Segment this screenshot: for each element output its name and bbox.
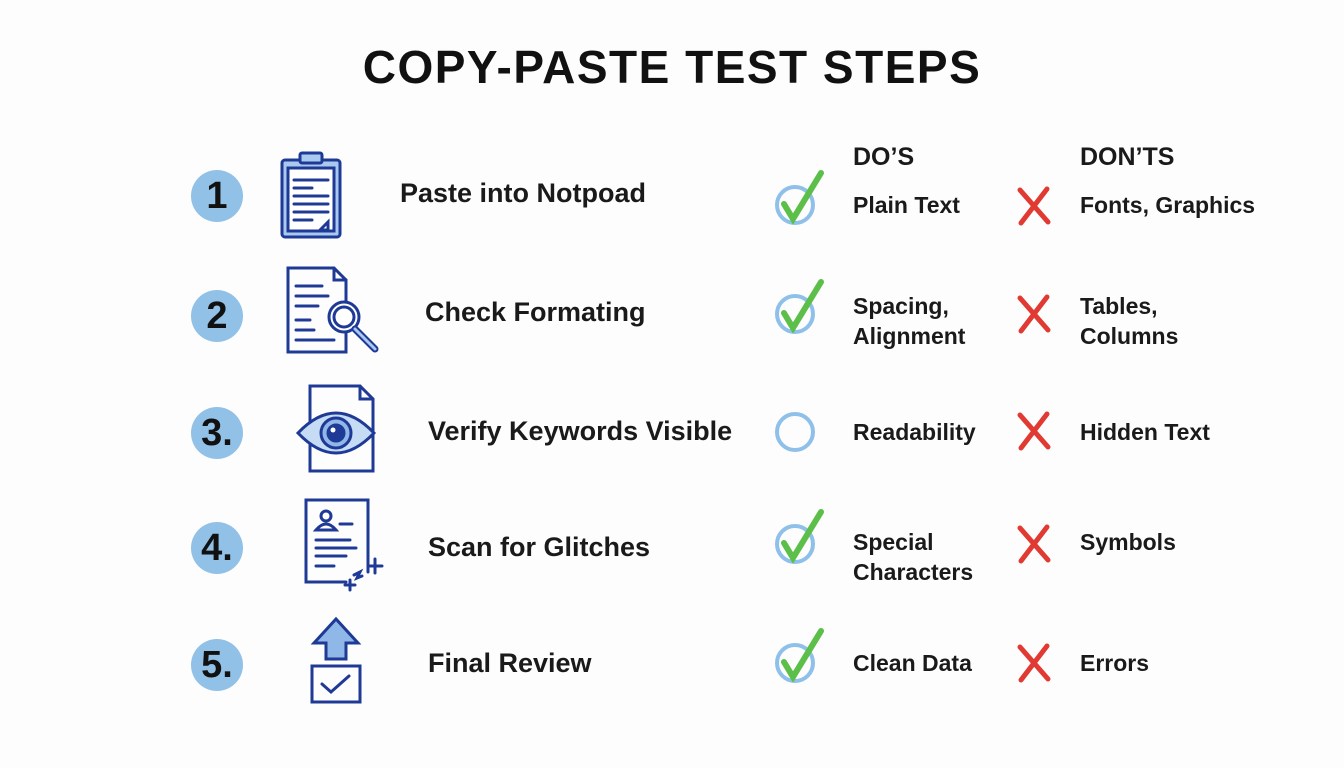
text: Characters [853,559,973,585]
number 4 [191,522,243,574]
text: Clean Data [853,650,972,676]
header: do's: DO’S [853,143,914,171]
x marks [1020,189,1048,680]
text: Errors [1080,650,1149,676]
text: Tables, [1080,293,1158,319]
icon: document with eye [298,386,374,471]
text: Verify Keywords Visible [428,416,732,446]
text: Columns [1080,323,1178,349]
text: Alignment [853,323,965,349]
number 3: 3. [201,412,233,454]
don't texts: Fonts, Graphics [1080,192,1255,218]
step texts: Paste into Notpoad [400,178,646,208]
number 2 [191,290,243,342]
do texts: Plain Text [853,192,960,218]
text: Check Formating [425,297,646,327]
check 4 [777,512,821,562]
number 5 [191,639,243,691]
text: Symbols [1080,529,1176,555]
number 5: 5. [201,644,233,686]
check 5 [777,631,821,681]
text: Readability [853,419,976,445]
check 1 [777,173,821,223]
text: Scan for Glitches [428,532,650,562]
text: Hidden Text [1080,419,1210,445]
icon: resume with glitch [306,500,382,590]
text: Final Review [428,648,592,678]
check 2 [777,282,821,332]
number 4: 4. [201,527,233,569]
number 2: 2 [206,295,228,337]
text: Spacing, [853,293,949,319]
icon: document with magnifier [288,268,375,352]
number 1 [191,170,243,222]
number 3 [191,407,243,459]
circle 3 [777,414,813,450]
icon: arrow and checkbox [312,619,360,702]
text: Special [853,529,934,555]
header: don'ts: DON’TS [1080,143,1174,171]
icon: clipboard [282,153,340,237]
title: COPY-PASTE TEST STEPS [363,41,981,93]
number 1: 1 [206,175,228,217]
